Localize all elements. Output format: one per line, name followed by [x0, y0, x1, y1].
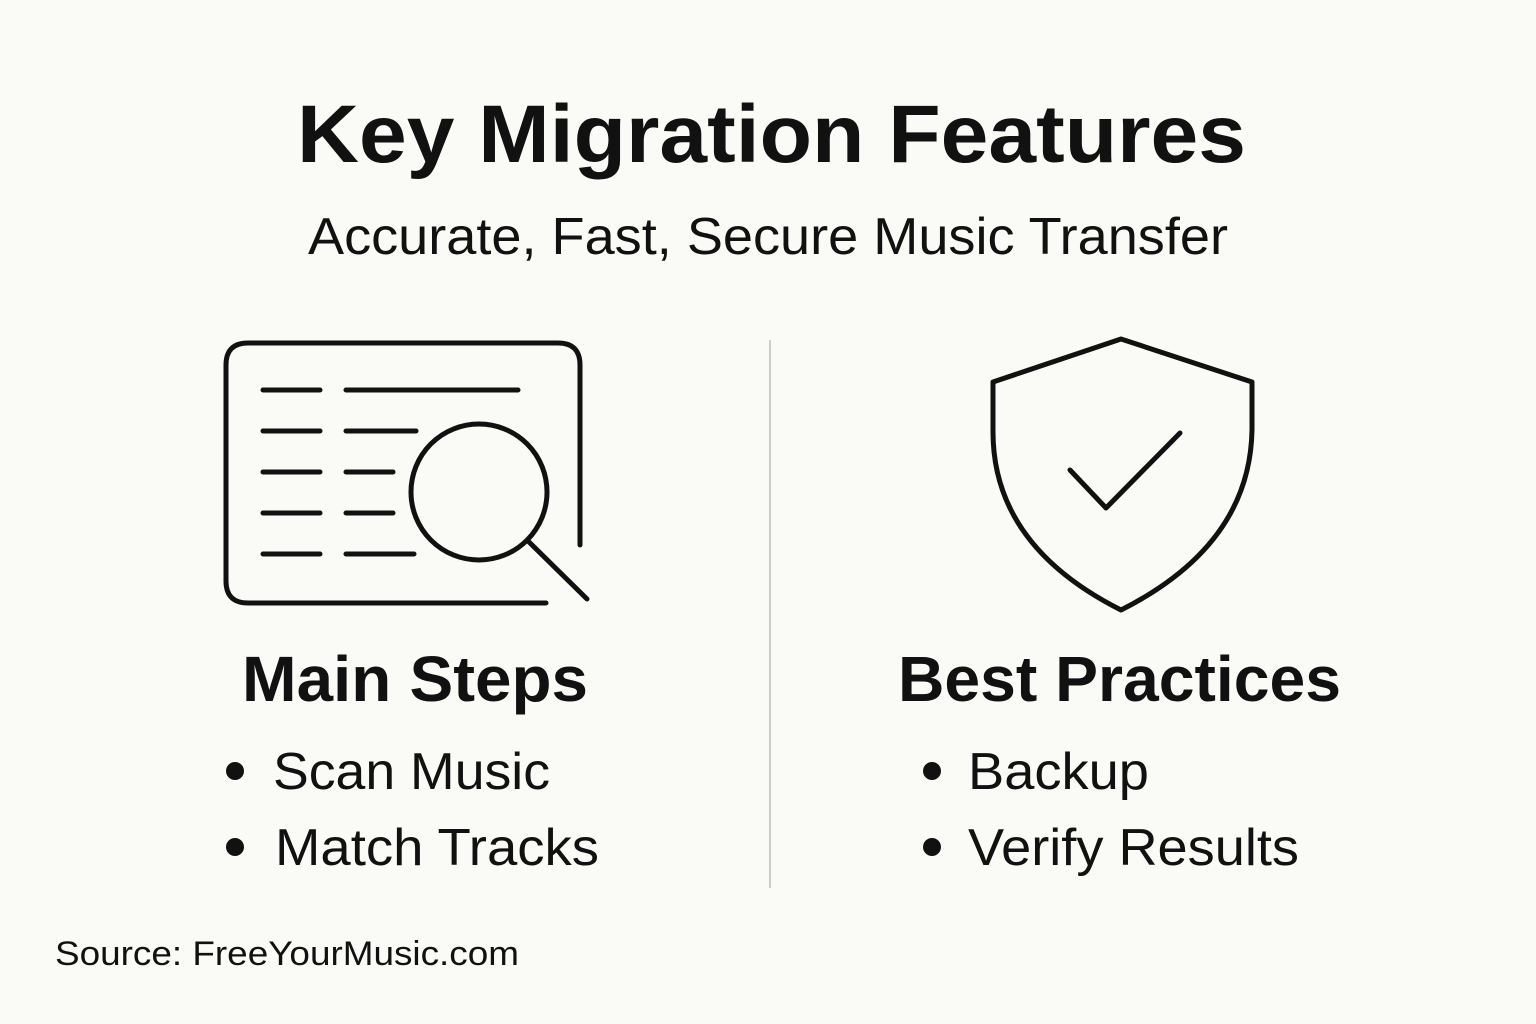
list: main steps: Scan Music	[273, 743, 550, 801]
heading: Main Steps: Main Steps	[242, 643, 588, 715]
list: best practices: Verify Results	[968, 819, 1299, 877]
heading: Best Practices: Best Practices	[898, 643, 1341, 715]
list: main steps	[226, 743, 599, 877]
list: main steps: Match Tracks	[275, 819, 599, 877]
icon: document with magnifier	[226, 343, 587, 603]
source: Source: FreeYourMusic.com	[55, 935, 519, 973]
list: best practices: Backup	[968, 743, 1149, 801]
list: best practices	[923, 743, 1299, 877]
icon: shield with check	[993, 339, 1252, 610]
title: Key Migration Features	[297, 89, 1246, 180]
subtitle: Accurate, Fast, Secure Music Transfer	[308, 208, 1228, 266]
